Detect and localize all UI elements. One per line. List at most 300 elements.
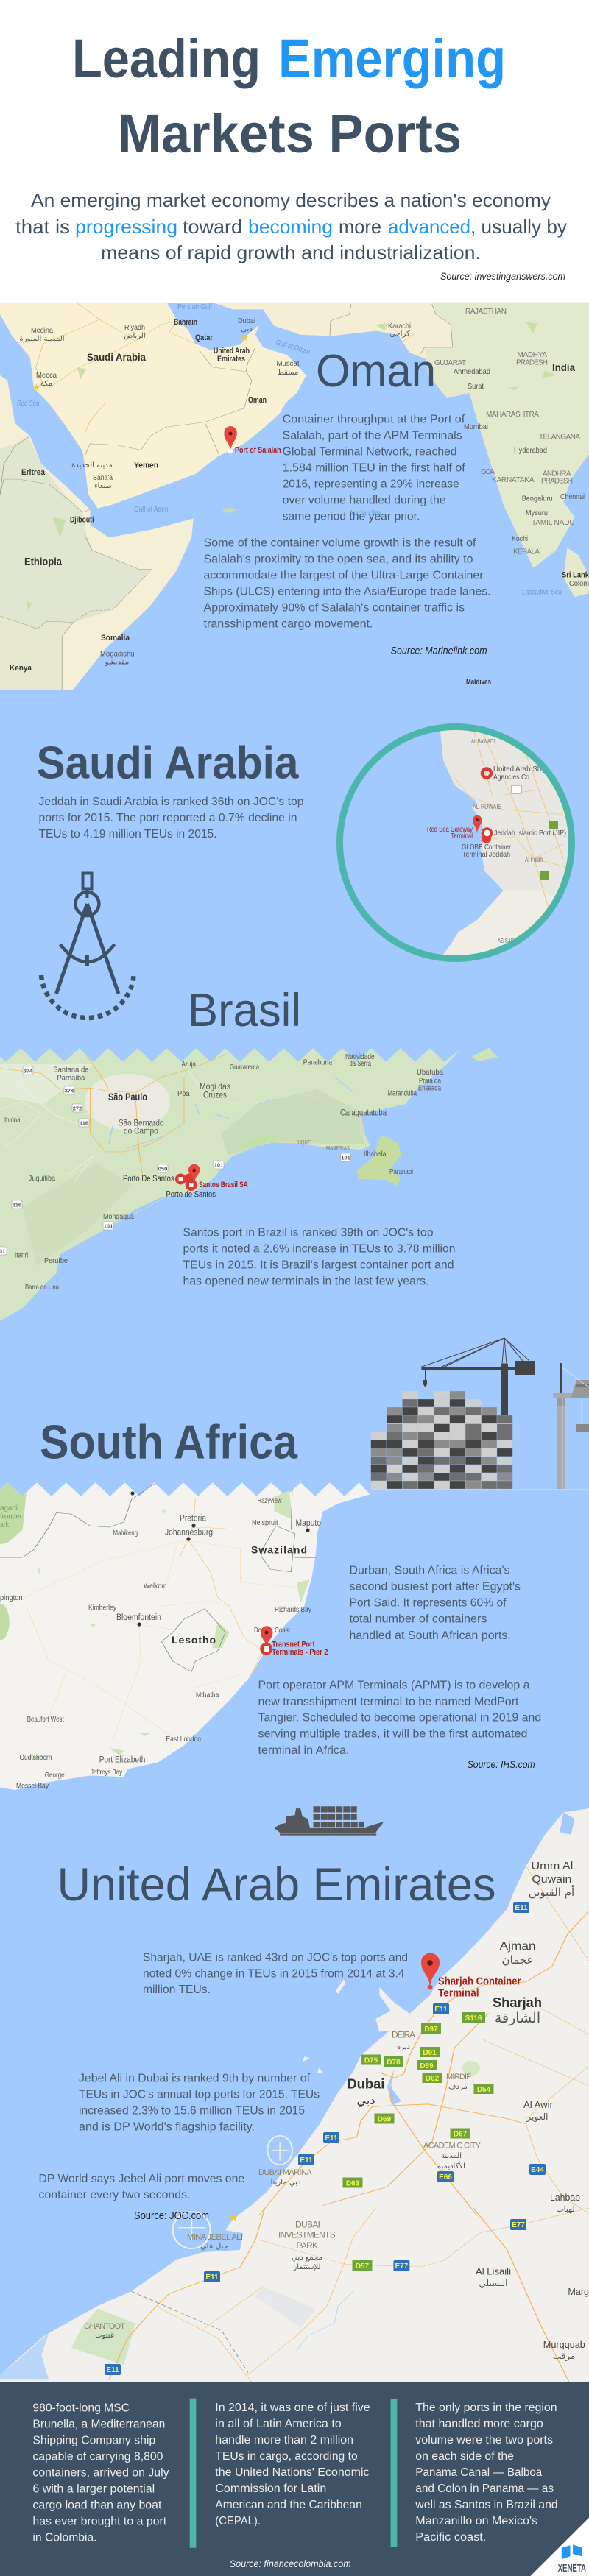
map labels: UAE: Umm Al xyxy=(531,1860,573,1872)
shield numbers xyxy=(0,1067,350,1254)
footer column 2: (CEPAL). xyxy=(215,2515,261,2527)
map labels: South Africa: Johannesburg xyxy=(165,1529,213,1538)
map labels: Oman map: United Arab xyxy=(214,347,250,355)
map labels: Brasil: Parnaíba xyxy=(57,1074,85,1083)
text: South Africa paragraph 2: new transshipment terminal to be named MedPort xyxy=(258,1696,519,1708)
footer column 3: that handled more cargo xyxy=(415,2418,543,2430)
palm ring and green patch xyxy=(0,2208,589,2382)
shield numbers: UAE: D97 xyxy=(424,2025,438,2034)
map labels: South Africa xyxy=(0,1496,328,1791)
shield numbers: UAE: D57 xyxy=(356,2262,370,2271)
text: DP World: DP World says Jebel Ali port moves one xyxy=(38,2173,244,2185)
map labels: Jeddah: Agencies Co xyxy=(493,773,529,782)
map labels: Brasil: Itariri xyxy=(15,1251,28,1260)
footer column 1: 6 with a larger potential xyxy=(32,2483,155,2496)
heading: Oman: Oman xyxy=(316,346,436,397)
map labels: Brasil: do Campo xyxy=(124,1126,158,1136)
map labels: Brasil: JUQUEÍ xyxy=(296,1139,312,1146)
islands and creek xyxy=(267,1812,575,2165)
map labels: UAE: ACADEMIC CITY xyxy=(423,2142,482,2151)
map labels: South Africa: Kimberley xyxy=(88,1603,117,1612)
map labels: UAE: جبل علي xyxy=(200,2243,228,2251)
source: investinganswers: Source: investinganswers.com xyxy=(440,271,565,282)
text: Oman paragraph 2: Ships (ULCS) entering into the Asia/Europe trade lanes. xyxy=(203,585,490,598)
footer column 3: Manzanillo on Mexico's xyxy=(415,2515,537,2527)
panel: Oman map xyxy=(0,302,589,690)
map labels: Brasil: Praia da xyxy=(419,1077,441,1086)
footer column 3: well as Santos in Brazil and xyxy=(415,2499,558,2511)
map labels: South Africa: Mossel Bay xyxy=(16,1782,49,1791)
panel: Jeddah circle map xyxy=(340,723,579,959)
footer column 1: has ever brought to a port xyxy=(32,2516,167,2528)
intro text: more xyxy=(339,216,381,238)
map labels: Jeddah: Al Falah xyxy=(525,856,543,864)
icon: map pin Santos xyxy=(175,1164,200,1191)
icon: map pin Durban xyxy=(260,1626,272,1655)
road shields: Brasil xyxy=(0,1066,350,1255)
map labels: Oman map: Medina xyxy=(31,326,53,335)
panel: footer xyxy=(0,2382,589,2576)
source: IHS: Source: IHS.com xyxy=(468,1759,535,1770)
map labels: South Africa: Hazyview xyxy=(258,1496,282,1505)
map labels: South Africa: Beaufort West xyxy=(27,1715,64,1724)
map labels: South Africa: Oudtshoorn xyxy=(19,1753,52,1762)
map labels: UAE: دبي xyxy=(357,2093,375,2108)
map labels: Oman map: الرياض xyxy=(124,332,146,340)
map labels: Brasil xyxy=(4,1052,443,1292)
map labels: Oman map: Port of Salalah xyxy=(235,446,281,455)
text: South Africa paragraph 1: Durban, South Africa is Africa's xyxy=(349,1565,510,1577)
corner with Xeneta logo xyxy=(530,2518,589,2576)
map labels: Oman map: مكة xyxy=(40,380,52,388)
source: financecolombia: Source: financecolombia.com xyxy=(230,2558,351,2569)
shield numbers: UAE: E11 xyxy=(325,2134,338,2142)
text: Oman paragraph 1: 2016, representing a 29% increase xyxy=(283,478,459,490)
shield numbers: 101 xyxy=(341,1154,350,1161)
second crane xyxy=(553,1363,589,1489)
map labels: Brasil: Santos Brasil SA xyxy=(199,1181,248,1189)
map labels: Brasil: Barra do Una xyxy=(25,1283,59,1292)
map labels: UAE: Lahbab xyxy=(550,2192,580,2203)
map labels: Oman map: Chennai xyxy=(560,492,585,501)
map labels: South Africa: East London xyxy=(166,1735,201,1744)
map labels: Oman map: Karachi xyxy=(388,322,411,330)
text: Sharjah xyxy=(143,1951,408,1996)
shield numbers: UAE: S116 xyxy=(465,2014,482,2023)
map labels: UAE: للإستثمار xyxy=(292,2263,321,2271)
map land: Arabia, Africa, India xyxy=(0,303,589,690)
map labels: UAE: GHANTOOT xyxy=(84,2322,125,2331)
intro text: becoming xyxy=(248,216,333,238)
shield numbers: UAE: D69 xyxy=(378,2115,392,2124)
shield numbers: UAE: D54 xyxy=(477,2086,491,2094)
text: Oman paragraph 2: transshipment cargo movement. xyxy=(203,618,373,630)
map labels: UAE: Dubai xyxy=(347,2077,384,2092)
shield numbers: UAE: D62 xyxy=(426,2075,440,2083)
shield numbers: UAE: E77 xyxy=(395,2262,409,2271)
map labels: Oman map: Eritrea xyxy=(21,468,46,477)
shield numbers: UAE: D63 xyxy=(346,2180,360,2187)
map labels: Oman map: Surat xyxy=(468,382,484,391)
footer column 1: Shipping Company ship xyxy=(32,2435,155,2447)
shield numbers: UAE: E11 xyxy=(205,2274,219,2282)
shield numbers: UAE: D78 xyxy=(387,2059,401,2067)
shield numbers: 116 xyxy=(80,1120,88,1126)
footer column 3: on each side of the xyxy=(415,2450,514,2463)
map labels: Oman map: Hyderabad xyxy=(514,446,547,455)
icon: star Jebel Ali: ★ xyxy=(228,2210,239,2225)
shield numbers: 116 xyxy=(13,1201,21,1209)
heading: Brasil: Brasil xyxy=(188,985,301,1036)
map labels: UAE: Murqquab xyxy=(543,2339,585,2350)
map labels: Oman map: Gulf of Oman xyxy=(275,338,311,356)
map labels: Brasil: Juquitiba xyxy=(29,1174,55,1183)
map labels: Oman map: Kenya xyxy=(10,664,32,673)
text: Sharjah: noted 0% change in TEUs in 2015 from 2014 at 3.4 xyxy=(143,1967,405,1980)
heading: South Africa: South Africa xyxy=(40,1415,298,1468)
map labels: Brasil: MARESIAS xyxy=(326,1145,350,1152)
footer column 1: cargo load than any boat xyxy=(32,2499,162,2512)
map labels: Oman map: Maldives xyxy=(466,678,491,687)
text: Brasil: has opened new terminals in the last few years. xyxy=(183,1275,428,1287)
title: Leading xyxy=(72,28,261,89)
text: Jebel Ali: TEUs in JOC's annual top ports for 2015. TEUs xyxy=(79,2089,320,2101)
map labels: UAE: المدينة xyxy=(441,2152,462,2160)
map labels: Brasil: Guararema xyxy=(230,1063,259,1072)
map labels: Oman map: صنعاء xyxy=(94,482,112,490)
text: South Africa paragraph 2: Port operator APM Terminals (APMT) is to develop a xyxy=(258,1680,530,1692)
map labels: Jeddah: AL-RUWAIS xyxy=(473,803,501,810)
text: South Africa paragraph 2: serving multiple trades, it will be the first automated xyxy=(258,1728,527,1741)
road shields xyxy=(512,785,558,880)
container stack xyxy=(371,1391,512,1489)
footer column 3: and Colon in Panama — as xyxy=(415,2483,554,2495)
map labels: South Africa: Lesotho xyxy=(172,1634,216,1646)
panel: South Africa map xyxy=(0,1482,370,1791)
map labels: Oman map: Persian Gulf xyxy=(177,302,212,311)
map labels: South Africa: Welkom xyxy=(144,1582,167,1590)
map labels: Brasil: Porto De Santos xyxy=(123,1175,174,1183)
text: Jebel Ali: Jebel Ali in Dubai is ranked 9th by number of xyxy=(79,2073,311,2085)
text: Jebel Ali xyxy=(79,2073,320,2134)
map labels: Brasil: Arujá xyxy=(181,1060,196,1069)
map labels: South Africa: Coast xyxy=(275,1626,290,1635)
map land: UAE coast xyxy=(0,1808,589,2382)
map labels: Brasil: Ubatuba xyxy=(417,1068,443,1077)
icon: container ship xyxy=(274,1806,384,1836)
shield numbers: UAE: D91 xyxy=(423,2049,437,2057)
text: Brasil xyxy=(183,1226,455,1287)
shield numbers: UAE: E44 xyxy=(531,2166,544,2174)
text: South Africa paragraph 1 xyxy=(349,1565,521,1642)
map labels: Oman map: Emirates xyxy=(217,355,245,364)
map labels: South Africa: Transnet Port xyxy=(272,1640,315,1649)
map labels: Oman map: Qatar xyxy=(195,333,214,342)
map labels: UAE: الشارقة xyxy=(495,2010,540,2026)
map labels: South Africa: frontier xyxy=(0,1512,22,1521)
map labels: Oman map: Mumbai xyxy=(464,422,488,431)
map labels: Brasil: São Paulo xyxy=(108,1091,147,1103)
text: Oman paragraph 1: same period the year prior. xyxy=(283,511,420,523)
map labels: Jeddah: United Arab Shipp xyxy=(493,765,551,774)
shield numbers: UAE: D89 xyxy=(420,2062,434,2070)
text: South Africa paragraph 1: total number of containers xyxy=(349,1613,487,1626)
map labels: South Africa: Do xyxy=(254,1626,261,1635)
text: DP World xyxy=(38,2173,244,2201)
map labels: UAE: العوير xyxy=(526,2112,548,2123)
footer column 1: Brunella, a Mediterranean xyxy=(32,2418,165,2431)
text: Saudi Arabia: TEUs to 4.19 million TEUs in 2015. xyxy=(38,828,216,841)
shield numbers: UAE: E11 xyxy=(434,2006,448,2014)
map labels: Oman map: ANDHRA xyxy=(543,470,571,478)
map labels: UAE: عجمان xyxy=(502,1953,533,1967)
map labels: UAE: لهباب xyxy=(556,2204,575,2214)
intro text: An emerging market economy describes a nation's economy xyxy=(31,189,551,211)
footer column 3: volume were the two ports xyxy=(415,2434,553,2446)
footer column 2: the United Nations' Economic xyxy=(215,2466,370,2479)
map labels: UAE: مرقب xyxy=(553,2351,575,2362)
map labels: Oman map: مسقط xyxy=(278,369,298,377)
map labels: UAE: غنتوت xyxy=(95,2332,114,2340)
shield numbers: 101 xyxy=(214,1161,223,1169)
city dots xyxy=(130,1491,310,1627)
shield numbers: 374 xyxy=(24,1067,33,1075)
shield numbers: 374 xyxy=(65,1088,74,1094)
map labels: Brasil: Caraguatatuba xyxy=(340,1109,387,1118)
roads upper UAE xyxy=(259,1866,589,2215)
map labels: UAE: Al Awir xyxy=(523,2099,554,2110)
shield numbers: 050 xyxy=(158,1166,167,1172)
icon: compass xyxy=(41,873,134,1018)
map labels: Oman map: TAMIL NADU xyxy=(532,519,575,527)
crane tower and jib xyxy=(420,1338,535,1415)
map labels: UAE: PARK xyxy=(296,2240,318,2251)
map labels: Oman map: RAJASTHAN xyxy=(465,308,507,316)
map labels: UAE: DUBAI MARINA xyxy=(258,2168,312,2177)
text: South Africa paragraph 1: handled at South African ports. xyxy=(349,1630,511,1642)
map labels: Oman map: KERALA xyxy=(513,548,540,556)
map labels: UAE: دبي مارينا xyxy=(271,2179,300,2187)
text: South Africa paragraph 2: terminal in Africa. xyxy=(258,1744,349,1757)
text: Sharjah: Sharjah, UAE is ranked 43rd on JOC's top ports and xyxy=(143,1951,408,1964)
map labels: Oman map: Bahrain xyxy=(174,318,197,327)
text: Brasil: ports it noted a 2.6% increase in TEUs to 3.78 million xyxy=(183,1242,455,1255)
source: JOC: Source: JOC.com xyxy=(134,2209,209,2222)
map labels: South Africa: Terminals - Pier 2 xyxy=(272,1648,328,1657)
text: Jebel Ali: and is DP World's flagship facility. xyxy=(79,2121,255,2134)
text: Sharjah: million TEUs. xyxy=(143,1984,211,1996)
footer column 3: Panama Canal — Balboa xyxy=(415,2466,543,2479)
map labels: Oman map: Ethiopia xyxy=(24,555,62,567)
map labels: Oman map: TELANGANA xyxy=(539,434,580,442)
text: Brasil: Santos port in Brazil is ranked 39th on JOC's top xyxy=(183,1226,433,1239)
map labels: Oman map: Sana'a xyxy=(93,473,113,482)
map labels: Oman map: Kochi xyxy=(512,534,528,543)
text: South Africa paragraph 1: Port Said. It represents 60% of xyxy=(349,1597,507,1609)
intro text: toward xyxy=(183,216,242,238)
shield numbers: UAE: D75 xyxy=(364,2056,378,2065)
footer column 2: American and the Caribbean xyxy=(215,2499,362,2511)
shield numbers: UAE: E11 xyxy=(515,1904,528,1912)
map labels: Oman map: Arabian Sea xyxy=(349,509,381,517)
icon: stars on Oman map xyxy=(32,333,249,394)
map labels: Oman map xyxy=(10,302,589,687)
map labels: South Africa: Swaziland xyxy=(251,1544,307,1556)
map labels: Oman map: کراچی xyxy=(389,330,410,339)
map labels: Brasil: Natividade xyxy=(345,1052,375,1061)
map labels: UAE: الأكاديمية xyxy=(437,2161,465,2170)
map labels: South Africa: pington xyxy=(0,1593,23,1602)
map labels: UAE: اليسيلي xyxy=(479,2278,507,2288)
map labels: Oman map: India xyxy=(552,361,575,373)
intro text: advanced xyxy=(388,216,470,238)
map labels: Oman map: Riyadh xyxy=(124,323,145,332)
shield numbers: UAE: D67 xyxy=(454,2130,468,2139)
footer column 2: handle more than 2 million xyxy=(215,2434,353,2446)
map labels: Brasil: Santana de xyxy=(53,1066,89,1075)
map labels: Brasil: Paranabi xyxy=(389,1167,413,1176)
intro text: , usually by xyxy=(470,216,567,238)
map labels: UAE: Sharjah Container xyxy=(438,1975,521,1987)
footer column 2: in all of Latin America to xyxy=(215,2418,342,2430)
heading: Saudi Arabia: Saudi Arabia xyxy=(37,738,299,789)
text: Oman paragraph 1: Global Terminal Network, reached xyxy=(283,445,457,458)
text: Oman paragraph 1: 1.584 million TEU in the first half of xyxy=(283,461,465,474)
source: Marinelink: Source: Marinelink.com xyxy=(391,645,487,657)
text: Saudi Arabia: ports for 2015. The port reported a 0.7% decline in xyxy=(38,812,297,824)
map labels: Oman map: Djibouti xyxy=(70,516,94,525)
map labels: Brasil: Ibiúna xyxy=(4,1116,21,1125)
map labels: Jeddah: AL BAWADI xyxy=(471,738,495,745)
shield numbers: UAE xyxy=(106,1904,544,2374)
map labels: UAE: MINA JEBEL ALI xyxy=(187,2233,243,2242)
title: Emerging xyxy=(278,28,506,89)
map labels: Oman map: GUJARAT xyxy=(434,359,466,367)
text: Oman paragraph 2 xyxy=(203,537,490,630)
teal divider 2 xyxy=(391,2399,397,2547)
panel: UAE map xyxy=(0,1808,589,2382)
road shields: UAE xyxy=(343,2012,493,2271)
map labels: South Africa: Maputo xyxy=(296,1519,321,1528)
footer column 2: Commission for Latin xyxy=(215,2483,326,2495)
footer column 1: containers, arrived on July xyxy=(32,2467,169,2480)
map labels: Oman map: مدينة الحديدة xyxy=(71,461,113,470)
map labels: Brasil: Porto de Santos xyxy=(166,1191,216,1200)
footer column 3 xyxy=(415,2402,558,2544)
map labels: Oman map: Somalia xyxy=(101,634,130,643)
map labels: Oman map: Dubai xyxy=(238,316,255,325)
text: South Africa paragraph 2 xyxy=(258,1680,541,1757)
text: Brasil: TEUs in 2015. It is Brazil's largest container port and xyxy=(183,1259,454,1271)
map labels: UAE: مردف xyxy=(448,2083,468,2091)
panel: Brasil map xyxy=(0,1048,498,1321)
map labels: Oman map: Muscat xyxy=(277,359,300,368)
icon: map pin Sharjah xyxy=(421,1953,440,1989)
map labels: Brasil: Maranduba xyxy=(387,1089,417,1098)
map labels: Oman map: Oman xyxy=(248,396,267,405)
map labels: South Africa: Mahikeng xyxy=(113,1529,138,1538)
map labels: Brasil: Mogi das xyxy=(200,1081,230,1091)
map labels: UAE: Quwain xyxy=(532,1873,571,1886)
map labels: Brasil: Enseada xyxy=(418,1084,441,1093)
map labels: Brasil: Mongaguá xyxy=(103,1212,134,1221)
map labels: South Africa: Port Elizabeth xyxy=(99,1756,145,1765)
text: Oman paragraph 1 xyxy=(283,413,465,523)
map labels: Oman map: المدينة المنورة xyxy=(19,335,65,343)
map labels: South Africa: ark xyxy=(0,1521,10,1529)
footer column 3: Pacific coast. xyxy=(415,2531,486,2544)
map labels: South Africa: Richards Bay xyxy=(275,1605,312,1614)
map labels: Brasil: da Serra xyxy=(349,1059,371,1068)
map labels: Oman map: Laccadive Sea xyxy=(522,588,562,597)
map labels: UAE: مجمع دبي xyxy=(292,2254,322,2262)
intro text: that is xyxy=(15,216,70,238)
map labels: Oman map: Ahmedabad xyxy=(454,367,490,376)
map labels: Oman map: مقديشو xyxy=(105,658,129,666)
map labels: Jeddah xyxy=(471,738,551,944)
map labels: UAE: DEIRA xyxy=(392,2030,415,2040)
shield numbers: 101 xyxy=(104,1223,113,1229)
map labels: UAE: ديرة xyxy=(397,2043,410,2051)
map labels: UAE: Al Lisaili xyxy=(476,2266,511,2277)
red markers and labels: GLOBE Container xyxy=(462,843,511,852)
footer column 2: TEUs in cargo, according to xyxy=(215,2450,358,2463)
shield numbers: UAE: E66 xyxy=(439,2173,452,2182)
blue shields: UAE xyxy=(105,1902,546,2375)
map labels: Oman map: GOA xyxy=(481,468,495,476)
map labels: Jeddah: AS SARAI xyxy=(498,938,518,944)
intro text: means of rapid growth and industrialization. xyxy=(101,241,481,263)
map labels: South Africa: agadi xyxy=(0,1504,18,1512)
teal divider 1 xyxy=(190,2399,196,2548)
heading: United Arab Emirates: United Arab Emirates xyxy=(57,1859,496,1911)
shield numbers: 272 xyxy=(73,1105,82,1111)
map labels: South Africa: George xyxy=(45,1771,65,1780)
title: Markets Ports xyxy=(118,103,462,164)
map labels: Oman map: Mecca xyxy=(36,371,57,380)
text: Oman paragraph 2: Salalah's proximity to the open sea, and its ability to xyxy=(203,553,473,565)
map labels: Oman map: دبي xyxy=(241,325,253,333)
footer column 1: 980-foot-long MSC xyxy=(32,2402,130,2415)
red markers and labels: Red Sea Gateway xyxy=(427,826,473,834)
text: Saudi Arabia: Jeddah in Saudi Arabia is ranked 36th on JOC's top xyxy=(38,796,303,808)
map labels: UAE: Sharjah xyxy=(493,1995,542,2010)
map labels: Oman map: Gulf of Aden xyxy=(134,505,169,514)
text: Oman paragraph 2: Approximately 90% of Salalah's container traffic is xyxy=(203,602,465,614)
icon: stars on Oman map: ★ xyxy=(240,333,249,344)
text: Jebel Ali: increased 2.3% to 15.6 million TEUs in 2015 xyxy=(79,2105,305,2117)
map labels: Brasil: São Bernardo xyxy=(119,1117,164,1128)
map labels: UAE: DUBAI xyxy=(295,2220,320,2230)
map labels: Brasil: Ilhabela xyxy=(364,1150,387,1158)
map labels: Oman map: Saudi Arabia xyxy=(87,351,146,363)
shield numbers: UAE: E77 xyxy=(512,2221,525,2229)
map labels: South Africa: Mthatha xyxy=(196,1691,219,1699)
text: Saudi Arabia xyxy=(38,796,303,841)
map labels: South Africa: Pretoria xyxy=(180,1514,207,1523)
map labels: Oman map: MADHYA xyxy=(517,351,547,359)
red markers and labels: Terminal xyxy=(451,832,473,841)
footer column 3: The only ports in the region xyxy=(415,2402,557,2414)
map labels: Brasil: Poá xyxy=(177,1089,190,1098)
text: Oman paragraph 1: Salalah, part of the APM Terminals xyxy=(283,429,462,442)
icon: port crane and container stack xyxy=(371,1338,589,1490)
map labels: UAE: Terminal xyxy=(438,1987,479,1999)
map labels: Oman map: Red Sea xyxy=(17,399,40,408)
island: Ilhabela xyxy=(357,1135,401,1186)
map labels: UAE: MIRDIF xyxy=(446,2073,471,2081)
map labels: Brasil: Peruíbe xyxy=(44,1256,68,1265)
